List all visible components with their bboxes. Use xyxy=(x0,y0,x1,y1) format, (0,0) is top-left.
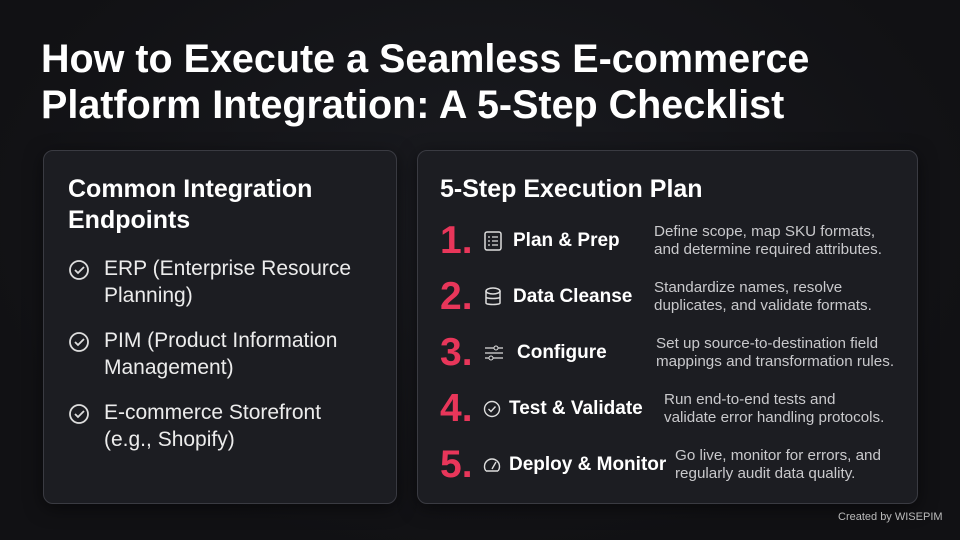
step 5: regularly audit data quality. xyxy=(675,465,855,482)
step 3: Set up source-to-destination field xyxy=(656,335,878,352)
step 2: duplicates, and validate formats. xyxy=(654,297,872,314)
item: PIM: Management) xyxy=(104,356,234,379)
step 1: 1. xyxy=(440,219,473,262)
step 5: Deploy & Monitor xyxy=(509,454,666,475)
step 5 xyxy=(440,443,881,486)
heading: steps: 5-Step Execution Plan xyxy=(440,175,703,203)
step 2 xyxy=(440,275,872,318)
step 1: Define scope, map SKU formats, xyxy=(654,223,875,240)
step 5: Go live, monitor for errors, and xyxy=(675,447,881,464)
heading: endpoints: Endpoints xyxy=(68,206,190,234)
step 4: Run end-to-end tests and xyxy=(664,391,835,408)
footer credit: Created by WISEPIM xyxy=(838,511,943,523)
heading: endpoints xyxy=(68,175,312,234)
item: PIM: PIM (Product Information xyxy=(104,329,337,352)
panel: steps xyxy=(417,150,918,504)
item: storefront: E-commerce Storefront xyxy=(104,401,321,424)
title: How to Execute a Seamless E-commerce xyxy=(41,37,809,81)
step 1: and determine required attributes. xyxy=(654,241,882,258)
step 2: Standardize names, resolve xyxy=(654,279,842,296)
panel: endpoints xyxy=(43,150,397,504)
heading: endpoints: Common Integration xyxy=(68,175,312,203)
step 4 xyxy=(440,387,884,430)
step 2: 2. xyxy=(440,275,473,318)
step 2: Data Cleanse xyxy=(513,286,632,307)
item: ERP: Planning) xyxy=(104,284,193,307)
item: storefront xyxy=(69,401,321,451)
item: ERP: ERP (Enterprise Resource xyxy=(104,257,351,280)
item: PIM xyxy=(69,329,337,379)
item: storefront: (e.g., Shopify) xyxy=(104,428,235,451)
step 4: Test & Validate xyxy=(509,398,643,419)
step 3: 3. xyxy=(440,331,473,374)
title xyxy=(41,37,809,127)
step 3: Configure xyxy=(517,342,607,363)
title: Platform Integration: A 5-Step Checklist xyxy=(41,83,784,127)
item: ERP xyxy=(69,257,351,307)
step 1: Plan & Prep xyxy=(513,230,620,251)
step 3: mappings and transformation rules. xyxy=(656,353,894,370)
step 5: 5. xyxy=(440,443,473,486)
step 4: 4. xyxy=(440,387,473,430)
step 4: validate error handling protocols. xyxy=(664,409,884,426)
step 3 xyxy=(440,331,894,374)
step 1 xyxy=(440,219,882,262)
